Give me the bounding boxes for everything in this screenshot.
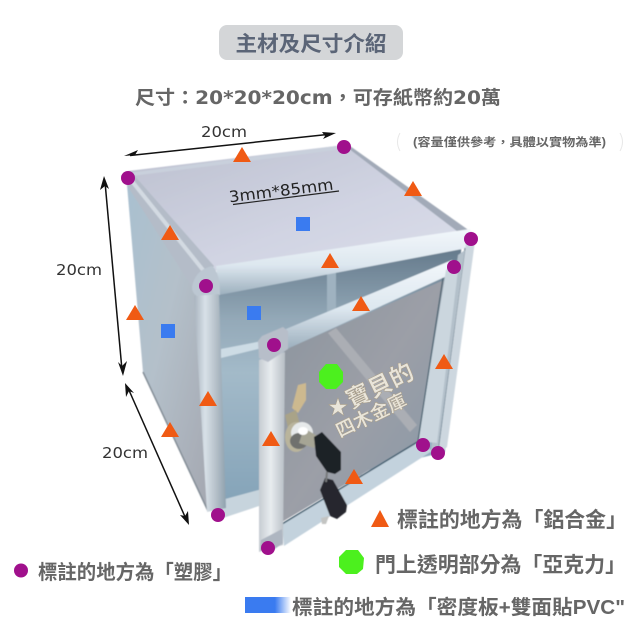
door top bar — [286, 260, 458, 349]
dimension label: depth: 20cm — [102, 444, 148, 462]
dimension arrow: bottom — [125, 383, 189, 525]
capacity note — [398, 133, 622, 151]
title pill: 主材及尺寸介紹 — [236, 32, 386, 56]
front left post — [194, 294, 226, 512]
green marker: acrylic — [319, 364, 343, 389]
interior shelf — [221, 341, 262, 358]
orange markers: aluminium alloy — [126, 147, 453, 484]
right post outer — [438, 241, 475, 455]
top panel — [128, 145, 471, 272]
top back rim — [128, 145, 344, 176]
capacity note: (容量僅供參考，具體以實物為準) — [413, 135, 606, 149]
watermark: 四木金庫 — [332, 388, 410, 442]
left panel lower edge — [143, 372, 208, 511]
left side panel — [127, 185, 208, 512]
blue markers: density board — [161, 217, 310, 338]
legend: density board: 標註的地方為「密度板+雙面貼PVC" — [292, 595, 625, 619]
front interior — [215, 240, 462, 505]
watermark — [328, 359, 418, 442]
door right frame — [418, 262, 459, 443]
product illustration: acrylic cash box — [121, 145, 475, 554]
top front rounded rim — [216, 229, 473, 295]
door bottom-left corner — [260, 529, 283, 554]
door left bar — [259, 352, 285, 552]
top back-right rim — [344, 145, 474, 238]
top left rounded rim — [121, 174, 214, 290]
legend: aluminium: 標註的地方為「鋁合金」 — [397, 508, 627, 532]
watermark: 寶貝的 — [342, 359, 418, 414]
door bottom bar — [282, 441, 432, 546]
door top-left corner — [258, 327, 288, 362]
interior back post — [327, 270, 336, 326]
door glass — [282, 280, 444, 522]
front corner cap — [192, 266, 220, 297]
title pill — [219, 25, 403, 60]
key blade — [321, 516, 329, 524]
lock body — [285, 410, 319, 452]
legend: plastic: 標註的地方為「塑膠」 — [38, 560, 232, 584]
dimension arrow: left — [100, 176, 127, 376]
size heading: 尺寸：20*20*20cm，可存紙幣約20萬 — [135, 87, 501, 109]
lock plate — [292, 383, 306, 413]
reflection inside glass — [328, 328, 417, 432]
dimension label: height: 20cm — [56, 261, 102, 279]
purple markers: plastic — [121, 140, 478, 555]
dimension label: top width: 20cm — [201, 123, 247, 141]
upper key — [314, 432, 341, 474]
watermark: ★ — [328, 397, 348, 419]
legend: acrylic: 門上透明部分為「亞克力」 — [375, 554, 626, 577]
coin slot label: 3mm*85mm — [228, 176, 334, 206]
dimension arrow: top — [124, 132, 336, 156]
lower key — [320, 478, 347, 519]
box bottom rail — [218, 489, 262, 519]
